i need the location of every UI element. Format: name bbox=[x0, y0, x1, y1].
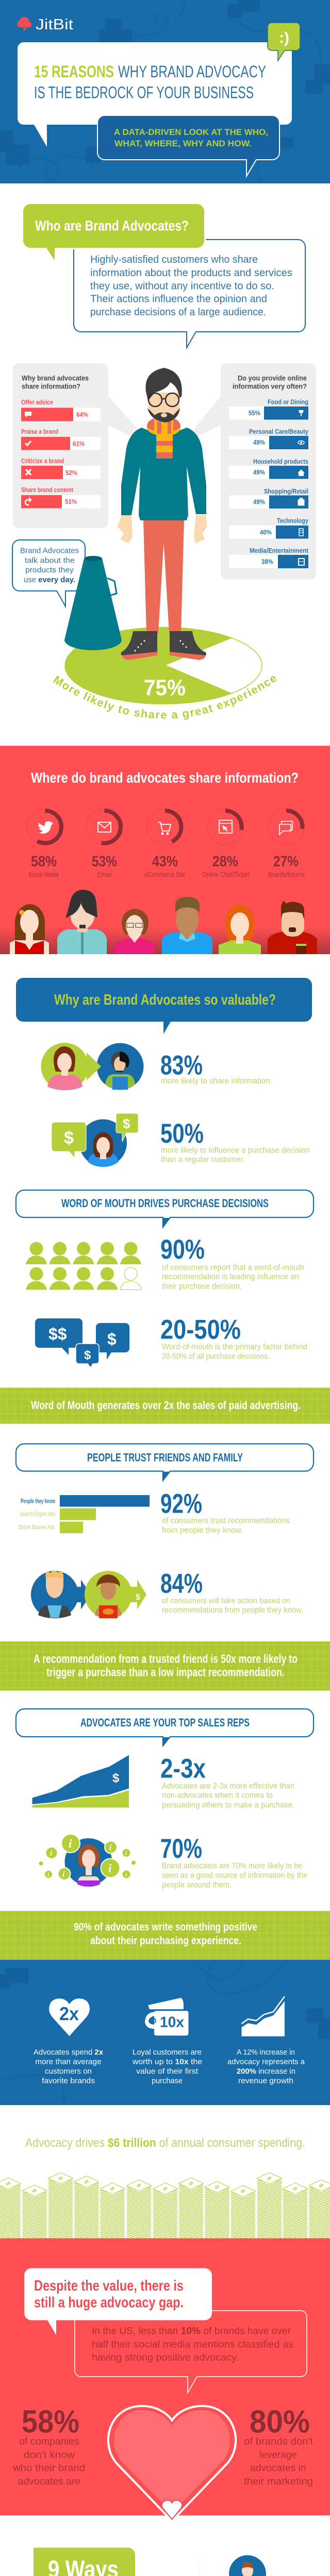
heading pill bbox=[16, 1709, 314, 1745]
bar: household bbox=[229, 457, 308, 479]
stat: 10x value: Loyal customers are bbox=[133, 2048, 202, 2057]
heading bubble: 9 Ways bbox=[34, 2548, 298, 2576]
bar chart: People they know bbox=[21, 1497, 55, 1504]
scarf bbox=[147, 418, 180, 459]
stat: 90%: of consumers report that a word-of-mouth bbox=[162, 1263, 304, 1272]
icon: heart 2x: 2x bbox=[59, 2003, 79, 2024]
smiley bubble bbox=[268, 23, 300, 61]
curved caption: More likely to share a great experience bbox=[53, 675, 276, 720]
stat: 10x value bbox=[132, 1998, 202, 2086]
bar: offer advice: 64% bbox=[76, 411, 88, 418]
stat: 10x value: value of their first bbox=[136, 2067, 199, 2076]
stat: 50%: than a regular customer. bbox=[161, 1155, 245, 1164]
chart: 75% pie bbox=[53, 626, 276, 720]
stat: 58%: 58% bbox=[22, 2404, 79, 2440]
stat: 80%: their marketing bbox=[244, 2476, 313, 2487]
bar: technology: 40% bbox=[260, 529, 272, 536]
stat: 90% bbox=[26, 1234, 304, 1291]
stat: 80% bbox=[244, 2404, 314, 2487]
definition outline bubble bbox=[74, 240, 305, 348]
callout: talk every day: talk about the bbox=[25, 556, 75, 565]
panel: why share (left grey) bbox=[13, 363, 139, 528]
illustration: money stacks: $ bbox=[82, 2179, 90, 2184]
stat: 80%: of brands don't bbox=[244, 2436, 314, 2447]
heading: 15 REASONS bbox=[34, 62, 114, 81]
bar chart: Online Banner Ads bbox=[18, 1523, 55, 1531]
icon: woman with info bubbles: i bbox=[109, 1844, 112, 1852]
stat: 90%: their purchase decision. bbox=[162, 1282, 242, 1291]
illustration: money stacks: $ bbox=[57, 2176, 63, 2181]
person 2 bbox=[57, 890, 107, 954]
illustration: money stacks: $ bbox=[108, 2186, 116, 2192]
stat: 2-3x bbox=[32, 1754, 294, 1809]
stat: 70%: Brand advocates are 70% more likely to be bbox=[162, 1862, 302, 1870]
icon: wallet 10x bbox=[145, 1998, 189, 2036]
heading bubble bbox=[16, 978, 312, 1034]
illustration: six people bbox=[10, 890, 317, 954]
bar: personal care: Personal Care/Beauty bbox=[249, 428, 309, 435]
stat: email: 53% bbox=[92, 853, 117, 870]
stat: 80%: 80% bbox=[250, 2404, 310, 2440]
bar: criticize a brand: 52% bbox=[65, 469, 77, 477]
stat: boards: 27% bbox=[273, 853, 299, 870]
bar: food: 55% bbox=[249, 409, 260, 417]
bar: criticize a brand bbox=[21, 457, 101, 479]
panel: why share (left grey): Why brand advocates bbox=[22, 374, 89, 382]
panel: who are brand advocates bbox=[12, 204, 316, 720]
outline bubble: half their social media mentions classified as bbox=[92, 2339, 293, 2350]
panel: advocacy gap bbox=[0, 2238, 330, 2521]
illustration: money stacks bbox=[0, 2173, 330, 2239]
bar chart: Search Engine Ads bbox=[20, 1511, 55, 1518]
bar: food bbox=[229, 398, 308, 419]
stat: social media bbox=[27, 809, 63, 878]
stat: email: Email bbox=[97, 870, 111, 878]
stat: ecommerce: eCommerce Site bbox=[145, 870, 185, 878]
heading bubble: Despite the value, there is bbox=[34, 2278, 184, 2294]
panel: blue stats trio bbox=[0, 1960, 330, 2105]
definition outline bubble: Their actions influence the opinion and bbox=[90, 294, 267, 305]
stat: 80%: advocates in bbox=[250, 2463, 306, 2474]
bar: praise a brand bbox=[21, 428, 101, 450]
stat: 70%: 70% bbox=[160, 1834, 202, 1864]
stat: online chat bbox=[202, 809, 249, 878]
bar: shopping bbox=[229, 487, 308, 509]
stat: ecommerce bbox=[145, 809, 185, 878]
panel: why are advocates so valuable bbox=[16, 978, 312, 1167]
heading pill bbox=[16, 1190, 314, 1227]
stat: 83%: 83% bbox=[160, 1050, 203, 1081]
trousers bbox=[143, 520, 184, 633]
stat: 58% bbox=[12, 2404, 85, 2487]
panel: word of mouth bbox=[0, 1190, 330, 1424]
bar: household: Household products bbox=[253, 457, 308, 465]
panel: 9 ways bbox=[34, 2548, 266, 2576]
icon: recommendation chain bbox=[31, 1570, 146, 1618]
illustration: money stacks: $ bbox=[4, 2181, 11, 2187]
bar: shopping: Shopping/Retail bbox=[264, 487, 308, 495]
icon: heart 2x bbox=[49, 1998, 90, 2036]
person 5 bbox=[219, 904, 261, 954]
head bbox=[145, 368, 182, 422]
icon: two people sharing bbox=[41, 1043, 143, 1090]
stat: 92%: 92% bbox=[160, 1489, 202, 1519]
icon: woman with info bubbles: i bbox=[47, 1872, 50, 1878]
stat: 92% bbox=[18, 1489, 290, 1535]
stat: 50% bbox=[52, 1113, 310, 1167]
icon: woman with info bubbles: i bbox=[125, 1872, 127, 1878]
illustration: money stacks: $ bbox=[30, 2188, 38, 2194]
stat: ecommerce: 43% bbox=[152, 853, 178, 870]
bar: offer advice bbox=[21, 398, 101, 421]
bar: technology: Technology bbox=[277, 517, 309, 524]
sweater bbox=[121, 428, 206, 520]
stat: social media: Social Media bbox=[28, 870, 59, 878]
bar: criticize a brand: Criticize a brand bbox=[21, 457, 64, 465]
heading pill bbox=[16, 1444, 314, 1481]
stat: boards: Boards/forums bbox=[268, 870, 305, 878]
stat: 50%: 50% bbox=[160, 1118, 204, 1149]
stat: 2x spend bbox=[34, 1998, 104, 2086]
banner: 90% write positive: 90% of advocates write something positive bbox=[74, 1921, 257, 1933]
panel: where do advocates share bbox=[0, 746, 330, 954]
panel: online information (right grey) bbox=[192, 363, 316, 580]
panel: $6 trillion bbox=[0, 2136, 330, 2239]
stat: 80%: leverage bbox=[259, 2449, 297, 2461]
stat: social media: 58% bbox=[31, 853, 57, 870]
bar: media: 38% bbox=[261, 557, 273, 566]
definition outline bubble: they use, without any incentive to do so. bbox=[90, 280, 274, 292]
stat: 83% bbox=[41, 1043, 272, 1090]
bar: share brand content: Share brand content bbox=[21, 486, 74, 494]
stat: online chat: Online Chat/Ticket bbox=[202, 870, 249, 878]
banner: 50x more likely bbox=[0, 1641, 330, 1691]
illustration: money stacks: $ bbox=[213, 2184, 220, 2190]
logo: JitBit bbox=[17, 16, 73, 33]
icon: revenue chart bbox=[241, 1996, 285, 2036]
stat: 2-3x: persuading others to make a purchase. bbox=[162, 1801, 294, 1809]
definition outline bubble: purchase decisions of a large audience. bbox=[90, 307, 266, 318]
chart: area growth bbox=[32, 1755, 129, 1807]
stat: 20-50%: 20-50% bbox=[160, 1315, 241, 1345]
heading bbox=[34, 62, 266, 102]
shoes bbox=[121, 631, 206, 660]
banner: 90% write positive bbox=[0, 1911, 330, 1960]
icon: influencer with dollars: $ bbox=[64, 1128, 74, 1148]
icon: dollar bubbles bbox=[35, 1318, 129, 1368]
banner: 2x sales bbox=[0, 1388, 330, 1424]
stat: 58%: who their brand bbox=[12, 2463, 85, 2474]
outline bubble bbox=[75, 2311, 307, 2393]
wordmark: JitBit bbox=[36, 16, 73, 33]
callout: talk every day bbox=[12, 540, 85, 606]
stat: 2-3x: non-advocates when it comes to bbox=[162, 1791, 273, 1800]
bar: personal care: 49% bbox=[253, 438, 265, 446]
icon: dollar bubbles: $$ bbox=[48, 1325, 67, 1343]
stat: 2-3x: 2-3x bbox=[160, 1754, 206, 1784]
heading pill: PEOPLE TRUST FRIENDS AND FAMILY bbox=[87, 1451, 243, 1464]
illustration: money stacks: $ bbox=[135, 2183, 142, 2189]
title bubble bbox=[18, 42, 292, 147]
stat: 58%: advocates are bbox=[18, 2476, 80, 2487]
chart: area growth: $ bbox=[112, 1771, 120, 1785]
panel: why share (left grey): share information? bbox=[22, 382, 80, 391]
stat: boards bbox=[268, 809, 305, 878]
stat: 70%: seen as a good source of information by the bbox=[162, 1871, 307, 1880]
icon: woman with info bubbles: i bbox=[50, 1850, 53, 1858]
stat: 90%: 90% bbox=[160, 1234, 205, 1265]
outline bubble: having strong positive advocacy. bbox=[92, 2352, 239, 2363]
bar: praise a brand: 61% bbox=[73, 440, 85, 447]
icon: woman with info bubbles bbox=[38, 1834, 136, 1887]
icon: woman with info bubbles: i bbox=[69, 1837, 72, 1850]
callout: talk every day: products they bbox=[25, 566, 74, 574]
icon: woman with info bubbles: i bbox=[62, 1871, 65, 1879]
heading: WHY BRAND ADVOCACY bbox=[118, 62, 266, 81]
stat: 92%: from people they know. bbox=[162, 1526, 243, 1535]
callout: talk every day: use every day. bbox=[24, 575, 75, 584]
stat: 2x spend: Advocates spend 2x bbox=[34, 2048, 104, 2057]
bar: offer advice: Offer advice bbox=[21, 398, 53, 406]
heading bubble bbox=[23, 204, 204, 261]
stat: 10x value: purchase bbox=[152, 2076, 183, 2086]
stat: email bbox=[87, 809, 123, 878]
panel: online information (right grey): information very often? bbox=[233, 382, 307, 391]
icon: wallet 10x: 10x bbox=[160, 2014, 184, 2031]
outline bubble: In the US, less than 10% of brands have over bbox=[92, 2326, 291, 2337]
hands bbox=[118, 515, 207, 543]
icon: influencer with dollars: $ bbox=[123, 1116, 130, 1131]
stat: 50%: more likely to influence a purchase decision bbox=[161, 1146, 310, 1155]
avatar: man orange top bbox=[229, 2555, 266, 2576]
stat: 70%: people around them. bbox=[162, 1880, 232, 1890]
stat: 84%: 84% bbox=[160, 1568, 203, 1599]
illustration: money stacks: $ bbox=[161, 2186, 168, 2192]
heading bubble: Who are Brand Advocates? bbox=[35, 217, 189, 234]
stat: online chat: 28% bbox=[212, 853, 238, 870]
stat: 200% growth bbox=[227, 1996, 305, 2086]
stat: 58%: don't know bbox=[24, 2449, 75, 2461]
illustration: money stacks: $ bbox=[239, 2189, 246, 2194]
icon: recommendation chain: $ bbox=[136, 1593, 140, 1602]
subtitle bubble bbox=[97, 115, 279, 176]
stat: 200% growth: A 12% increase in bbox=[237, 2048, 295, 2057]
callout: talk every day: Brand Advocates bbox=[20, 546, 79, 555]
stat: 2-3x: Advocates are 2-3x more effective than bbox=[162, 1782, 294, 1791]
stat: 10x value: worth up to 10x the bbox=[132, 2058, 202, 2066]
person 1 bbox=[10, 904, 49, 954]
bar: media: Media/Entertainment bbox=[250, 547, 309, 554]
stat: 84% bbox=[31, 1568, 303, 1618]
stat: 84%: of consumers will take action based on bbox=[162, 1597, 290, 1605]
heading bubble bbox=[24, 2268, 212, 2335]
stat: 20-50%: Word-of-mouth is the primary factor behind bbox=[162, 1343, 307, 1351]
stat: 58%: of companies bbox=[19, 2436, 79, 2447]
bar chart bbox=[18, 1495, 150, 1533]
icon: woman with info bubbles: i bbox=[125, 1851, 127, 1857]
headline: Advocacy drives $6 trillion of annual consumer spending. bbox=[25, 2136, 305, 2150]
stat: 90%: recommendation is leading influence on bbox=[162, 1273, 299, 1281]
banner: 90% write positive: about their purchasing experience. bbox=[90, 1935, 241, 1946]
stat: 92%: of consumers trust recommendations bbox=[162, 1517, 290, 1525]
bar: media bbox=[229, 547, 309, 568]
person 6 bbox=[268, 901, 317, 954]
illustration: money stacks: $ bbox=[266, 2176, 272, 2181]
illustration: money stacks: $ bbox=[317, 2183, 324, 2189]
panel: people trust friends and family bbox=[0, 1444, 330, 1691]
icon: people grid bbox=[26, 1242, 141, 1290]
icon: megaphone bbox=[64, 556, 122, 650]
subtitle bubble: WHAT, WHERE, WHY AND HOW. bbox=[114, 139, 252, 148]
heading pill: ADVOCATES ARE YOUR TOP SALES REPS bbox=[80, 1716, 250, 1729]
panel: online information (right grey): Do you provide online bbox=[238, 374, 307, 382]
stat: 84%: recommendations from people they know. bbox=[162, 1606, 303, 1615]
illustration: advocate man bbox=[118, 368, 207, 660]
icon: dollar bubbles: $ bbox=[107, 1330, 117, 1348]
bar: share brand content bbox=[21, 486, 101, 508]
subtitle bubble: A DATA-DRIVEN LOOK AT THE WHO, bbox=[114, 128, 268, 137]
stat: 200% growth: advocacy represents a bbox=[227, 2058, 305, 2066]
stat: 200% growth: 200% increase in bbox=[237, 2067, 295, 2076]
icon: dollar bubbles: $ bbox=[84, 1348, 91, 1362]
bar: share brand content: 51% bbox=[65, 498, 77, 505]
definition outline bubble: information about the products and services bbox=[90, 267, 292, 279]
icon: influencer with dollars bbox=[52, 1113, 138, 1167]
person 3 bbox=[114, 909, 155, 954]
panel: advocates are your top sales reps bbox=[0, 1709, 330, 1960]
heading bubble: Why are Brand Advocates so valuable? bbox=[54, 992, 276, 1008]
stat: 2x spend: customers on bbox=[45, 2067, 92, 2076]
stat: 2x spend: more than average bbox=[35, 2058, 101, 2066]
icon: cloud bbox=[17, 17, 31, 32]
stat: 83%: more likely to share information. bbox=[161, 1077, 272, 1086]
stat: 200% growth: revenue growth bbox=[238, 2076, 293, 2086]
bar: personal care bbox=[229, 428, 309, 449]
bar: praise a brand: Praise a brand bbox=[21, 428, 58, 435]
bar: food: Food or Dining bbox=[268, 398, 308, 406]
avatars bbox=[229, 2555, 266, 2576]
heading bubble: still a huge advocacy gap. bbox=[34, 2295, 184, 2311]
icon: woman with info bubbles: i bbox=[108, 1862, 112, 1875]
person 4 bbox=[162, 897, 212, 954]
stat: 20-50%: 20-50% of all purchase decisions. bbox=[162, 1352, 270, 1361]
stat: 20-50% bbox=[35, 1315, 307, 1368]
bar: shopping: 49% bbox=[253, 498, 265, 506]
stat: 70% bbox=[38, 1834, 307, 1890]
definition outline bubble: Highly-satisfied customers who share bbox=[90, 254, 258, 265]
bar: technology bbox=[229, 517, 309, 539]
illustration: money stacks: $ bbox=[291, 2186, 298, 2192]
chart: 75% pie: 75% bbox=[144, 675, 186, 701]
smiley bubble: :) bbox=[279, 29, 289, 46]
stat: 2x spend: favorite brands bbox=[42, 2076, 95, 2086]
bar: household: 49% bbox=[253, 468, 265, 476]
illustration: money stacks: $ bbox=[187, 2181, 194, 2187]
panel: header bbox=[0, 0, 330, 183]
illustration: heart bbox=[108, 2406, 236, 2521]
